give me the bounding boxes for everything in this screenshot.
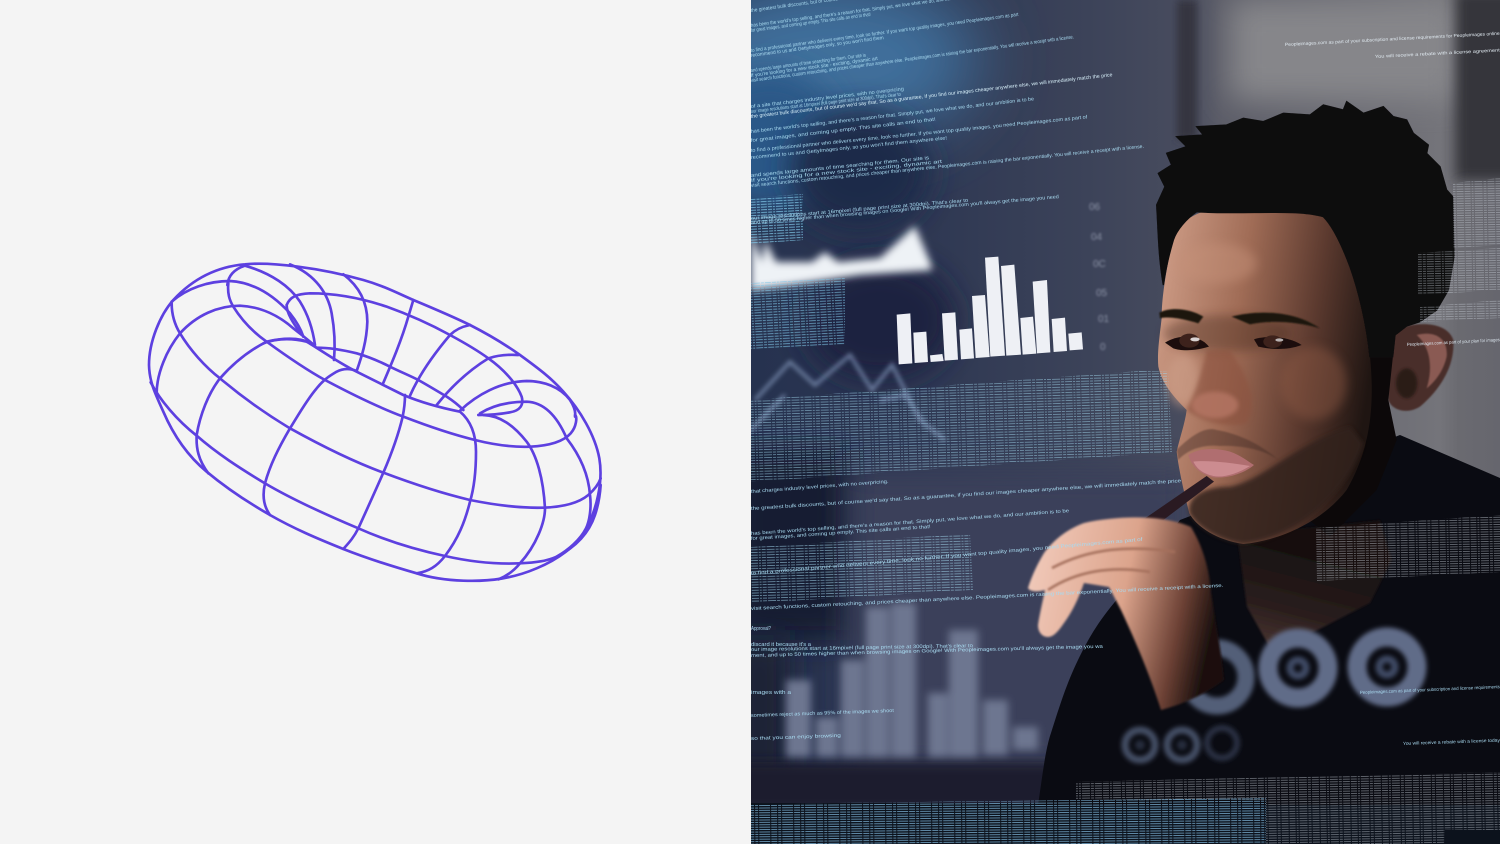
screen text lines: the greatest bulk discounts, but of course we'd say that. So as a guarantee, if you find our images cheaper anywhere else, we will immediately match the price bbox=[751, 478, 1181, 512]
interface rings on shirt bbox=[1125, 637, 1417, 760]
screen text lines: and spends large amounts of time searching for them. Our site is bbox=[750, 52, 867, 74]
screen text lines: to find a professional partner who delivers every time, look no further. If you want top quality images, you need Peopleimages.com as part of bbox=[751, 114, 1088, 154]
screen text lines: our image resolutions start at 16mpixel (full page print size at 300dpi). That's clear to bbox=[751, 92, 901, 115]
torus wireframe bbox=[149, 264, 601, 581]
bar chart axis labels: 05 bbox=[1096, 288, 1108, 299]
bar chart axis labels: 0C bbox=[1093, 259, 1106, 270]
bar chart axis labels bbox=[1089, 202, 1110, 353]
shadow below ear bbox=[1312, 357, 1396, 536]
bar chart axis labels: 06 bbox=[1089, 202, 1101, 213]
screen text lines: recommend to us and GettyImages only, so you won't find them anywhere else! bbox=[751, 135, 947, 161]
eyes bbox=[1165, 334, 1302, 350]
man: shirt bbox=[1038, 435, 1500, 805]
screen text lines: visit search functions, custom retouching, and prices cheaper than anywhere else. Peopleimages.com is raising the bar exponentially. You will receive a receipt with a license. bbox=[750, 34, 1074, 84]
screen text lines: If you're looking for a new stock site - exciting, dynamic art bbox=[751, 159, 943, 184]
screen text lines: ment, and up to 50 times higher than when browsing images on Google! With Peopleimages.com you'll always get the image you wa bbox=[751, 644, 1103, 659]
face bbox=[1158, 203, 1372, 544]
man: hand bbox=[1028, 517, 1224, 710]
screen text lines: visit search functions, custom retouching, and prices cheaper than anywhere else. Peopleimages.com is raising the bar exponentially. You will receive a receipt with a license. bbox=[751, 144, 1144, 189]
screen text lines: visit search functions, custom retouching, and prices cheaper than anywhere else. Peopleimages.com is raising the bar exponentially. You will receive a receipt with a license. bbox=[751, 583, 1224, 612]
screen text lines: the greatest bulk discounts, but of course we'd say that. So as a guarantee, if you find our images cheaper anywhere else, we will immediately match the price bbox=[751, 72, 1113, 120]
screen text lines: discard it because it's a bbox=[751, 642, 811, 648]
bar chart axis labels: 04 bbox=[1091, 232, 1103, 243]
right photo panel: analyst behind data screen bbox=[680, 0, 1500, 844]
latitude lines bbox=[151, 283, 601, 564]
screen text lines: for great images, and coming up empty. This site calls an end to that! bbox=[751, 524, 931, 542]
blurred area chart bbox=[751, 226, 932, 290]
screen text lines: If you're looking for a new stock site - exciting, dynamic art bbox=[750, 56, 879, 79]
screen text lines: so that you can enjoy browsing bbox=[751, 733, 841, 742]
screen text lines: You will receive a rebate with a license today bbox=[1403, 738, 1500, 746]
bar chart axis labels: 01 bbox=[1098, 314, 1110, 325]
screen text lines: and spends large amounts of time searching for them. Our site is bbox=[751, 155, 930, 179]
screen text lines: and up to 50 times higher than when browsing images on Google! With Peopleimages.com you'll always get the image you need bbox=[751, 194, 1059, 226]
screen text lines: has been the world's top selling, and there's a reason for that. Simply put, we love what we do, and our ambition is to be bbox=[751, 96, 1035, 135]
screen text lines: sometimes reject as much as 95% of the images we shoot bbox=[751, 708, 895, 719]
screen text lines: images with a bbox=[751, 690, 791, 696]
screen text lines: our image resolutions start at 16mpixel (full page print size at 300dpi). That's clear to bbox=[751, 643, 973, 653]
screen text lines: has been the world's top selling, and there's a reason for that. Simply put, we love what we do, and our ambition is to be bbox=[751, 508, 1070, 537]
photo background bbox=[680, 0, 1500, 844]
screen text lines: Approval? bbox=[751, 626, 771, 632]
screen text lines bbox=[750, 0, 1500, 746]
screen text lines: that charges industry level prices, with no overpricing. bbox=[751, 479, 889, 495]
left panel background bbox=[0, 0, 751, 844]
blurred line chart bbox=[751, 355, 945, 440]
man: head bbox=[1145, 102, 1454, 544]
blocks of screen text bbox=[751, 178, 1500, 844]
pen bbox=[1145, 476, 1214, 520]
meridian lines bbox=[157, 264, 591, 579]
screen text lines: of a site that charges industry level prices, with no overpricing bbox=[751, 86, 904, 110]
screen text lines: to find a professional partner who delivers every time, look no further. If you want top quality images, you need Peopleimages.com as part bbox=[750, 12, 1019, 54]
screen text lines: recommend to us and GettyImages only, so you won't find them bbox=[750, 35, 884, 59]
hair bbox=[1157, 102, 1454, 357]
lips bbox=[1188, 449, 1254, 478]
finger creases bbox=[1048, 549, 1175, 590]
screen text lines: to find a professional partner who delivers every time, look no further. If you want top quality images, you need Peopleimages.com as part of bbox=[751, 537, 1143, 577]
screen text lines: for great images, and coming up empty. This site calls an end to that! bbox=[751, 117, 936, 144]
blurred lower bar chart bbox=[786, 603, 1038, 757]
ear bbox=[1388, 324, 1453, 411]
bar chart axis labels: 0 bbox=[1100, 342, 1106, 353]
eyebrows bbox=[1159, 309, 1320, 328]
screen text lines: for great images, and coming up empty. This site calls an end to that! bbox=[750, 12, 871, 34]
screen text lines: Peopleimages.com as part of your subscription and license requirements for Peopleimages online bbox=[1285, 31, 1500, 47]
man: neck bbox=[1237, 520, 1392, 653]
screen text lines: You will receive a rebate with a license agreement bbox=[1375, 47, 1500, 59]
screen text lines: our image resolutions start at 16mpixel (full page print size at 300dpi). That's clear to bbox=[751, 198, 969, 222]
torus silhouette bbox=[149, 264, 601, 581]
bar chart bbox=[897, 257, 1083, 364]
